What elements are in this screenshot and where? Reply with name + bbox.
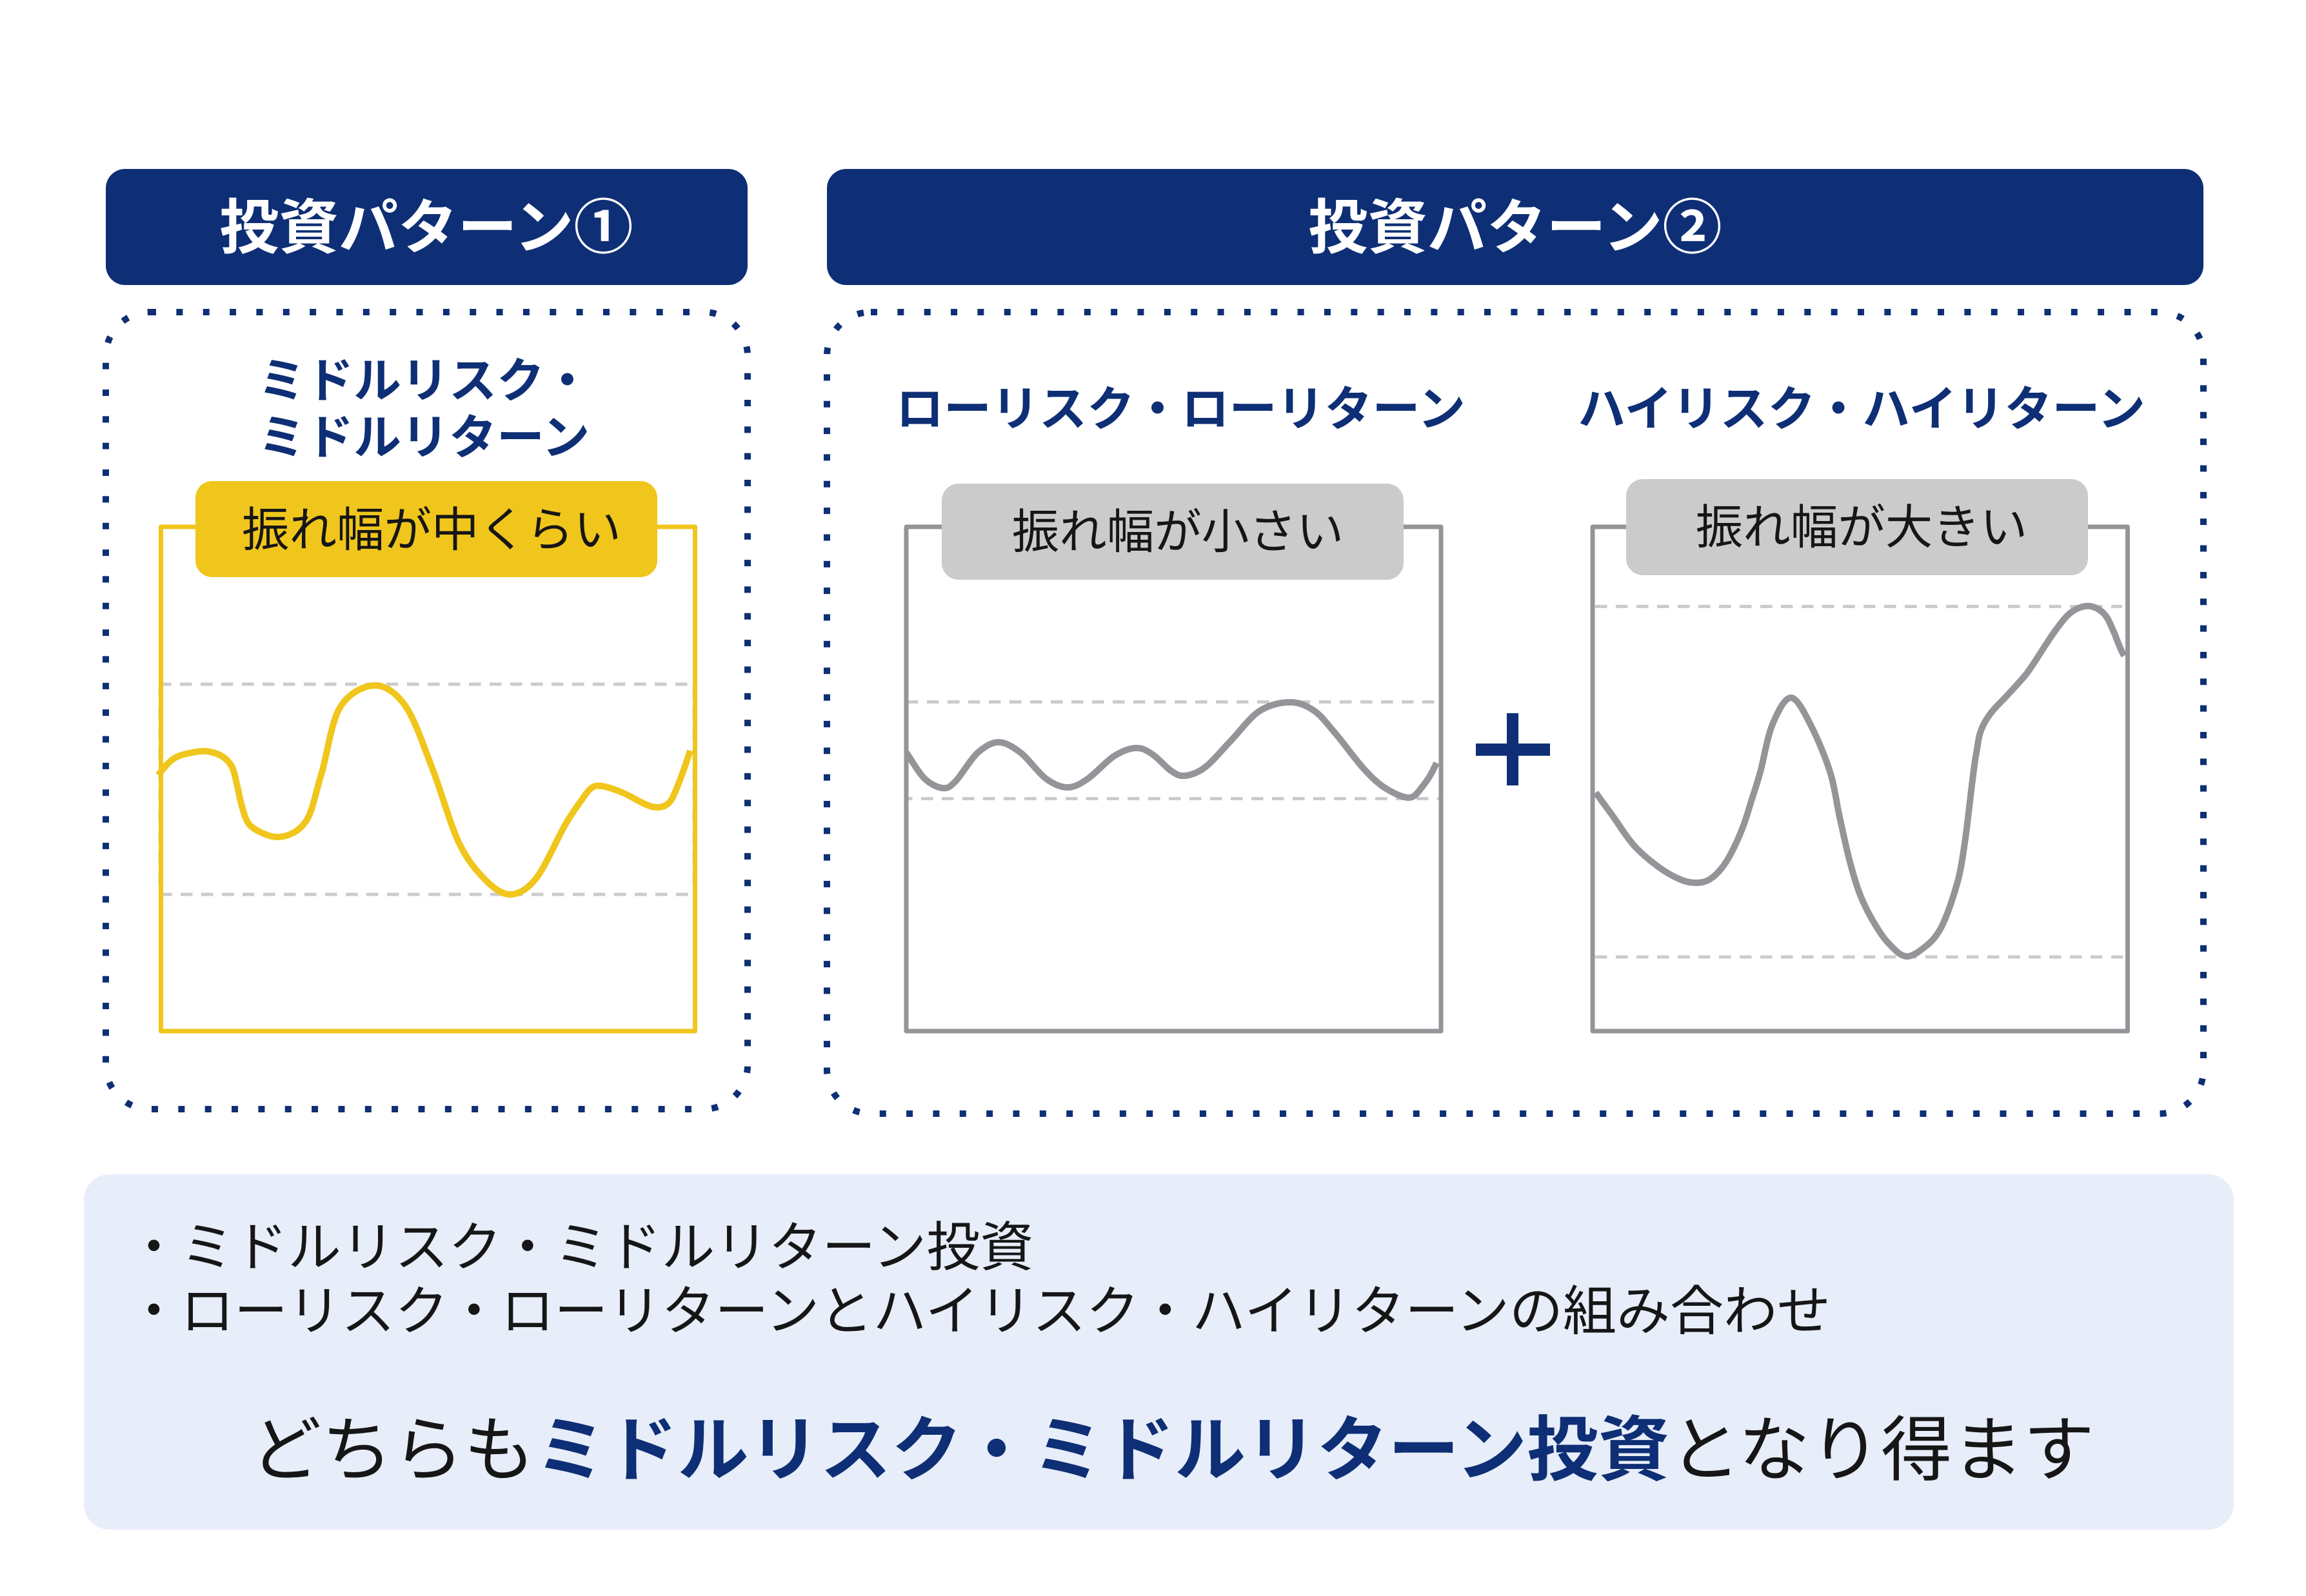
label: medium amplitude: 振れ幅が中くらい (242, 492, 621, 560)
heading: investment pattern 2: 投資パターン② (1308, 179, 1722, 266)
heading: investment pattern 2 (827, 169, 2203, 285)
heading: investment pattern 1: 投資パターン① (219, 179, 633, 266)
chart: small amplitude (906, 484, 1441, 1031)
subheading: middle risk middle return: ミドルリターン (258, 399, 590, 468)
heading: investment pattern 1 (106, 169, 748, 285)
subheading: middle risk middle return: ミドルリスク・ (258, 342, 591, 411)
subheading: low risk low return: ローリスク・ローリターン (896, 371, 1466, 440)
label: medium amplitude (195, 481, 657, 577)
text: bullet list (127, 1204, 1831, 1345)
panel: pattern 2 dotted frame (827, 312, 2203, 1114)
label: large amplitude (1626, 479, 2088, 575)
chart: large amplitude (1593, 479, 2127, 1031)
subheading: high risk high return: ハイリスク・ハイリターン (1578, 371, 2145, 440)
subheading: middle risk middle return (258, 342, 591, 468)
text: conclusion: どちらもミドルリスク・ミドルリターン投資となり得ます (250, 1392, 2094, 1495)
text: bullet list: ・ミドルリスク・ミドルリターン投資 (127, 1204, 1033, 1281)
label: small amplitude: 振れ幅が小さい (1012, 494, 1344, 562)
text: bullet list: ・ローリスク・ローリターンとハイリスク・ハイリターンの組み合わせ (127, 1268, 1831, 1345)
chart: medium amplitude (158, 481, 695, 1031)
panel: summary (84, 1174, 2234, 1530)
label: small amplitude (942, 484, 1404, 580)
panel: pattern 1 dotted frame (106, 312, 748, 1109)
label: large amplitude: 振れ幅が大きい (1696, 489, 2027, 558)
icon: plus (1476, 713, 1550, 785)
